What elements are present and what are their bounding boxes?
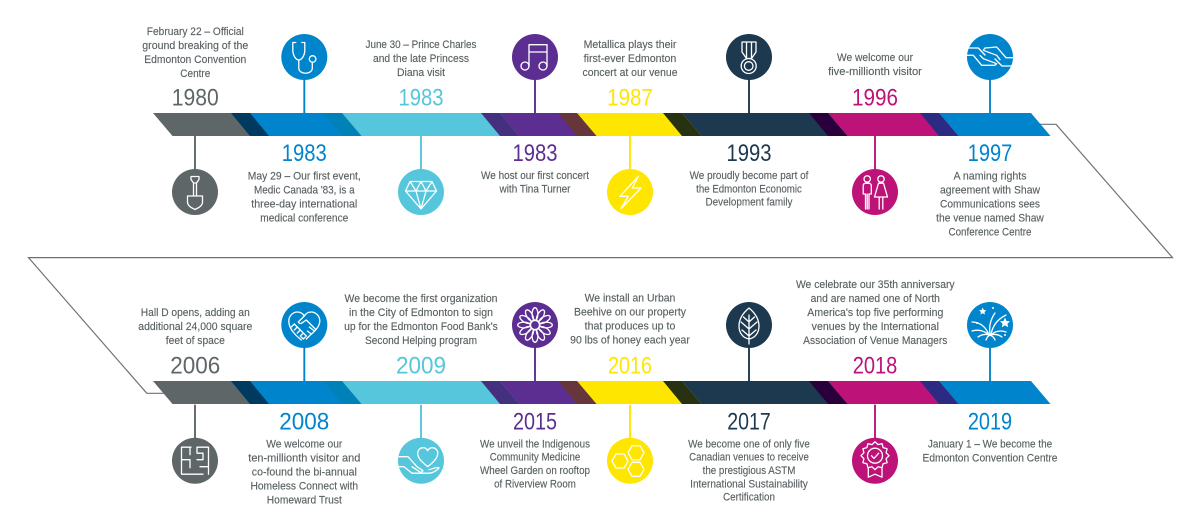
text block: additional 24,000 square [138,321,252,333]
year: 1997 [968,140,1012,167]
event: 1993 economic development [690,34,809,209]
text block: in the City of Edmonton to sign [349,307,493,319]
year: 1983 [282,140,327,167]
text block: the prestigious ASTM [703,465,795,477]
icon: shovel [172,136,218,215]
text block [688,438,810,504]
event: 2008 ten-millionth visitor [248,302,360,506]
text block: feet of space [166,335,225,347]
text block [796,279,955,347]
text block [582,39,678,79]
text block: Diana visit [397,67,446,79]
text block: Edmonton Convention [144,54,246,66]
year: 1993 [726,140,772,167]
text block: Wheel Garden on rooftop [480,465,590,477]
text block: the Edmonton Economic [696,183,802,195]
year: 1996 [852,85,898,112]
year: 2019 [968,408,1012,435]
text block: agreement with Shaw [940,184,1041,196]
text block: International Sustainability [690,478,808,490]
event: 1997 naming rights [936,34,1045,238]
icon: honeycomb [607,405,653,484]
text block: ten-millionth visitor and [248,452,360,464]
text block [366,39,477,79]
text block: June 30 – Prince Charles [366,39,477,51]
event: 1983 first event [248,34,361,224]
text block: We celebrate our 35th anniversary [796,279,955,291]
year: 1987 [607,85,653,112]
icon: heart in hand [398,405,444,484]
text block: Association of Venue Managers [803,335,948,347]
icon: floor plan [172,405,218,484]
text block: Medic Canada '83, is a [254,184,355,196]
text block: January 1 – We become the [928,438,1052,450]
text block: February 22 – Official [147,26,244,38]
year: 2018 [853,353,897,380]
text block: of Riverview Room [494,478,576,490]
text block: Canadian venues to receive [689,452,809,464]
year: 1983 [398,85,444,112]
event: 2016 Urban Beehive [570,292,690,484]
event: 2019 Edmonton Convention Centre [922,302,1058,464]
event: 1983 Tina Turner [481,34,590,195]
icon: clasped hands [967,34,1013,113]
timeline bar: row 2 [153,381,1050,404]
text block [142,26,248,80]
event: 2009 Second Helping [344,293,498,484]
icon: music notes [512,34,558,113]
icon: leaf [726,302,772,381]
text block: A naming rights [954,170,1027,182]
text block: the venue named Shaw [936,212,1045,224]
year: 2016 [608,353,652,380]
text block: ground breaking of the [142,40,248,52]
text block [828,52,922,78]
text block [344,293,498,347]
icon: flower [512,302,558,381]
event: 1996 five-millionth visitor [828,52,922,215]
text block: Certification [723,492,775,504]
text block [138,307,252,347]
text block [480,438,590,490]
text block: Edmonton Convention Centre [922,452,1058,464]
icon: award badge [852,405,898,484]
text block: Homeless Connect with [250,480,358,492]
icon: diamond [398,136,444,215]
text block: Community Medicine [490,452,580,464]
timeline bar: row 1 [153,113,1050,136]
text block: Second Helping program [365,335,477,347]
icon: heart handshake [281,302,327,381]
text block: We welcome our [266,438,343,450]
text block: We host our first concert [481,170,590,182]
text block: May 29 – Our first event, [248,170,361,182]
text block [570,292,690,346]
text block: Metallica plays their [584,39,677,51]
event: 1980 ground breaking [142,26,248,215]
text block: first-ever Edmonton [584,53,676,65]
text block [248,438,360,506]
text block: and are named one of North [811,293,940,305]
text block [481,170,590,195]
year: 2015 [513,408,557,435]
text block: Hall D opens, adding an [141,307,250,319]
year: 1980 [172,85,219,112]
icon: medal [726,34,772,113]
text block: up for the Edmonton Food Bank's [344,321,498,333]
year: 2009 [396,353,446,380]
event: 2017 ASTM certification [688,302,810,504]
event: 1987 Metallica [582,39,678,215]
text block: We become one of only five [688,438,810,450]
text block: Centre [180,68,210,80]
text block: Development family [706,197,793,209]
event: 1983 royal visit [366,39,477,215]
text block: concert at our venue [582,67,678,79]
text block: We install an Urban [585,292,675,304]
text block: We unveil the Indigenous [480,438,590,450]
event: 2018 35th anniversary [796,279,955,484]
text block [936,170,1045,238]
text block: Communications sees [940,198,1040,210]
text block: We proudly become part of [690,170,809,182]
text block: co-found the bi-annual [252,466,357,478]
text block: Homeward Trust [267,494,343,506]
year: 2006 [170,353,220,380]
text block: five-millionth visitor [828,66,922,78]
text block: venues by the International [812,321,939,333]
text block [248,170,361,224]
text block: America's top five performing [807,307,943,319]
year: 1983 [512,140,558,167]
text block: three-day international [251,198,357,210]
text block: with Tina Turner [499,183,571,195]
icon: lightning bolt [607,136,653,215]
text block: We welcome our [837,52,913,64]
text block: medical conference [260,212,348,224]
text block [922,438,1058,464]
year: 2008 [279,408,329,435]
year: 2017 [727,408,771,435]
icon: fireworks [967,302,1013,381]
event: 2006 Hall D [138,307,252,484]
text block: and the late Princess [373,53,469,65]
text block: 90 lbs of honey each year [570,334,690,346]
icon: visitors [852,136,898,215]
text block: Conference Centre [948,226,1032,238]
icon: stethoscope [281,34,327,113]
text block: that produces up to [585,320,675,332]
event: 2015 Medicine Wheel Garden [480,302,590,490]
text block [690,170,809,209]
text block: We become the first organization [344,293,498,305]
connector line between the two timeline rows [28,124,1172,393]
text block: Beehive on our property [574,306,686,318]
